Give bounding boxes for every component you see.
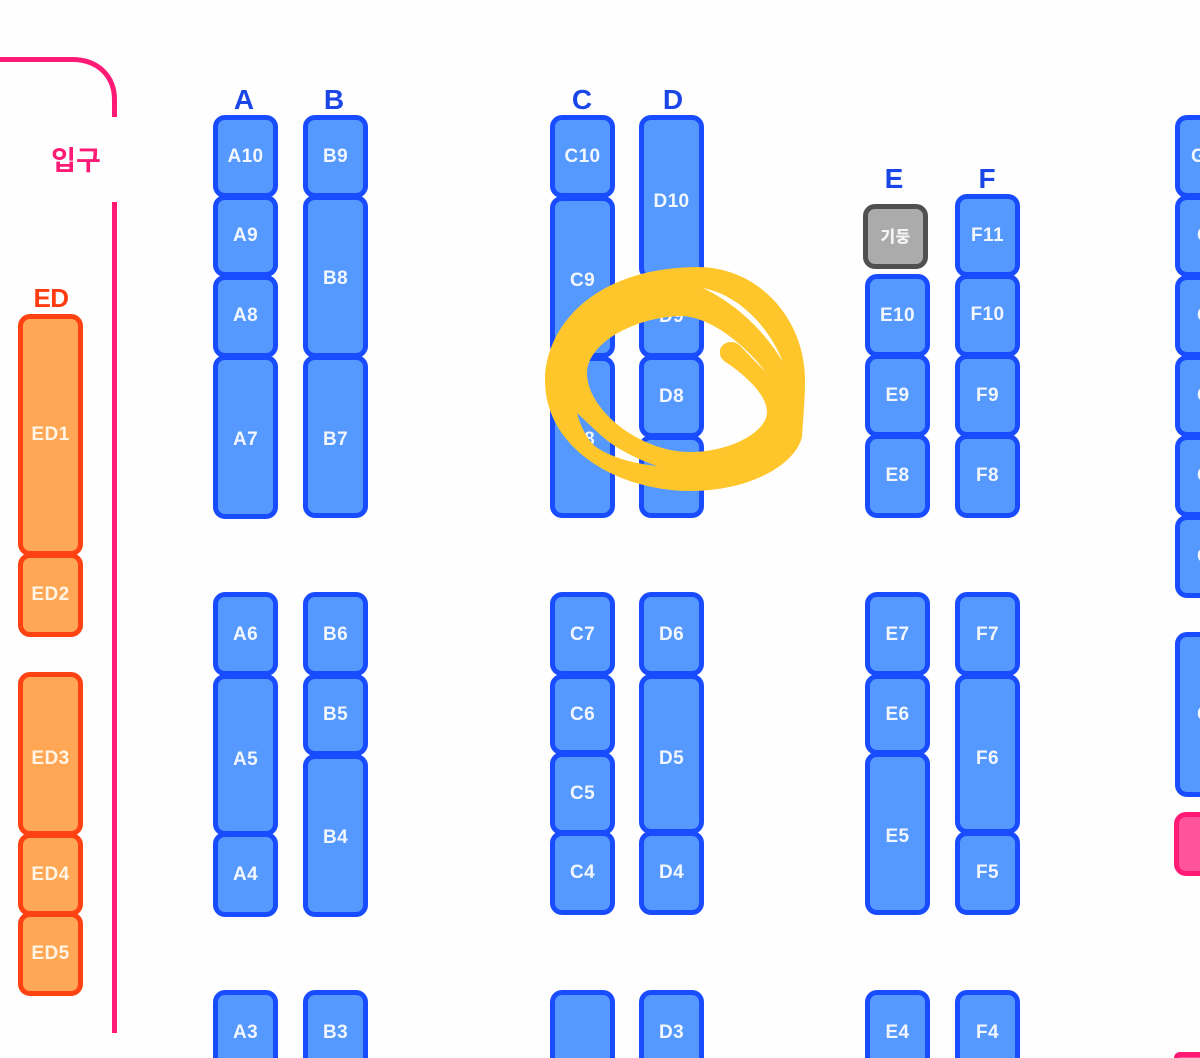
seat C8: [550, 356, 615, 518]
seat G8, cut off at page edge: [1175, 275, 1200, 357]
seat F6: [955, 674, 1020, 834]
pink seat, cut off at page edge: [1174, 812, 1200, 876]
seat A8: A8: [233, 304, 258, 326]
seat D7: D7: [659, 466, 684, 486]
seat C3 blank: [550, 990, 615, 1058]
seat A4: A4: [233, 864, 258, 884]
seat A5: [213, 674, 278, 836]
seat D5: [639, 674, 704, 834]
heading: F: F: [978, 163, 996, 194]
seat G4, cut off at page edge: [1175, 632, 1200, 797]
seat B5: B5: [323, 704, 348, 725]
seat A7: [213, 355, 278, 519]
seat D4: [639, 831, 704, 915]
seat D3: D3: [659, 1022, 684, 1042]
seat F11: F11: [971, 224, 1004, 246]
seat F5: [955, 831, 1020, 915]
seat B7: B7: [323, 428, 348, 450]
seat C9: C9: [570, 270, 595, 291]
seat ED4: ED4: [31, 864, 70, 884]
seat F7: [955, 592, 1020, 676]
seat F9: F9: [976, 384, 999, 406]
seat F8: F8: [976, 465, 999, 486]
seat E5: [865, 752, 930, 915]
seat F10: F10: [971, 304, 1004, 324]
pillar: 기둥: [880, 228, 911, 246]
seat A3: [213, 990, 278, 1058]
heading: B: B: [324, 84, 344, 115]
seat G7, cut off at page edge: [1175, 355, 1200, 437]
seat A6: [213, 592, 278, 676]
seat D6: [639, 592, 704, 676]
seat B4: B4: [323, 826, 348, 848]
seat D4: D4: [659, 862, 684, 883]
heading: A: A: [234, 84, 254, 115]
seat E4: E4: [885, 1022, 910, 1042]
yellow hand-drawn circle highlight: [545, 267, 805, 491]
heading: ED: ED: [33, 283, 69, 313]
seat C5: [550, 752, 615, 835]
heading: E: E: [885, 163, 903, 194]
seat C4: [550, 831, 615, 915]
seat B3: B3: [323, 1022, 348, 1042]
seat E6: [865, 674, 930, 755]
seat D6: D6: [659, 624, 684, 645]
seat G9, cut off at page edge: [1175, 195, 1200, 277]
seat D3: [639, 990, 704, 1058]
seat E10: E10: [880, 304, 915, 326]
entrance wall: [0, 57, 117, 1033]
seat E6: E6: [885, 704, 910, 724]
seat D8: D8: [659, 386, 684, 406]
seat A4: [213, 832, 278, 917]
seat F11: [955, 194, 1020, 277]
seat ED3: [18, 672, 83, 836]
seat B9: B9: [323, 146, 348, 166]
seat E8: E8: [885, 465, 910, 486]
seat D10: [639, 115, 704, 280]
seat A5: A5: [233, 749, 258, 770]
seat A9: A9: [233, 225, 258, 246]
seat F4: F4: [976, 1022, 999, 1042]
seat B7: [303, 355, 368, 518]
seat B5: [303, 674, 368, 756]
seat A7: A7: [233, 429, 258, 450]
seat C4: C4: [570, 862, 595, 883]
seat F10: [955, 274, 1020, 357]
seat ED5: [18, 912, 83, 996]
seat D8: [639, 355, 704, 438]
seat B8: B8: [323, 268, 348, 288]
seat C5: C5: [570, 782, 595, 804]
seat G5, cut off at page edge: [1175, 515, 1200, 598]
seat F8: [955, 434, 1020, 518]
pink seat, cut off at page edge: [1174, 1052, 1200, 1058]
seat ED1: [18, 314, 83, 556]
seat D5: D5: [659, 748, 684, 769]
seat G10, cut off at page edge: [1175, 115, 1200, 198]
seat ED3: ED3: [31, 748, 70, 768]
seat C6: C6: [570, 704, 595, 724]
seat ED5: ED5: [31, 943, 70, 964]
seat ED2: ED2: [31, 584, 70, 605]
seat C7: C7: [570, 624, 595, 645]
seat B3: [303, 990, 368, 1058]
seat A3: A3: [233, 1022, 258, 1042]
seat F5: F5: [976, 862, 999, 883]
heading: C: C: [572, 84, 592, 115]
seat ED1: ED1: [31, 424, 70, 445]
seat B8: [303, 195, 368, 358]
pillar: [863, 204, 928, 269]
seat B6: B6: [323, 624, 348, 645]
seat B9: [303, 115, 368, 198]
seat C10: C10: [564, 146, 601, 166]
seat D9: [639, 275, 704, 358]
seat B4: [303, 754, 368, 917]
seat E7: E7: [885, 624, 910, 645]
entrance label: 입구: [51, 146, 101, 176]
seat A8: [213, 275, 278, 358]
seat E9: [865, 354, 930, 437]
seat A10: A10: [227, 146, 264, 166]
seat C7: [550, 592, 615, 676]
seat E4: [865, 990, 930, 1058]
seat E8: [865, 434, 930, 518]
seat E9: E9: [885, 384, 910, 406]
seat F4: [955, 990, 1020, 1058]
seat F6: F6: [976, 748, 999, 769]
heading: D: D: [663, 84, 683, 115]
seat E7: [865, 592, 930, 676]
seat A6: A6: [233, 624, 258, 645]
seat C6: [550, 674, 615, 755]
seat D7: [639, 435, 704, 518]
seat F7: F7: [976, 624, 999, 645]
seat D10: D10: [653, 190, 690, 212]
seat E5: E5: [885, 826, 910, 846]
seat C10: [550, 115, 615, 198]
seat C9: [550, 196, 615, 358]
seat D9: D9: [659, 306, 684, 326]
seat B6: [303, 592, 368, 676]
seat A9: [213, 195, 278, 277]
seat G6, cut off at page edge: [1175, 435, 1200, 517]
seat ED2: [18, 553, 83, 637]
seat C8: C8: [570, 429, 595, 450]
seat ED4: [18, 833, 83, 916]
seat A10: [213, 115, 278, 198]
seat E10: [865, 274, 930, 357]
seat F9: [955, 354, 1020, 437]
